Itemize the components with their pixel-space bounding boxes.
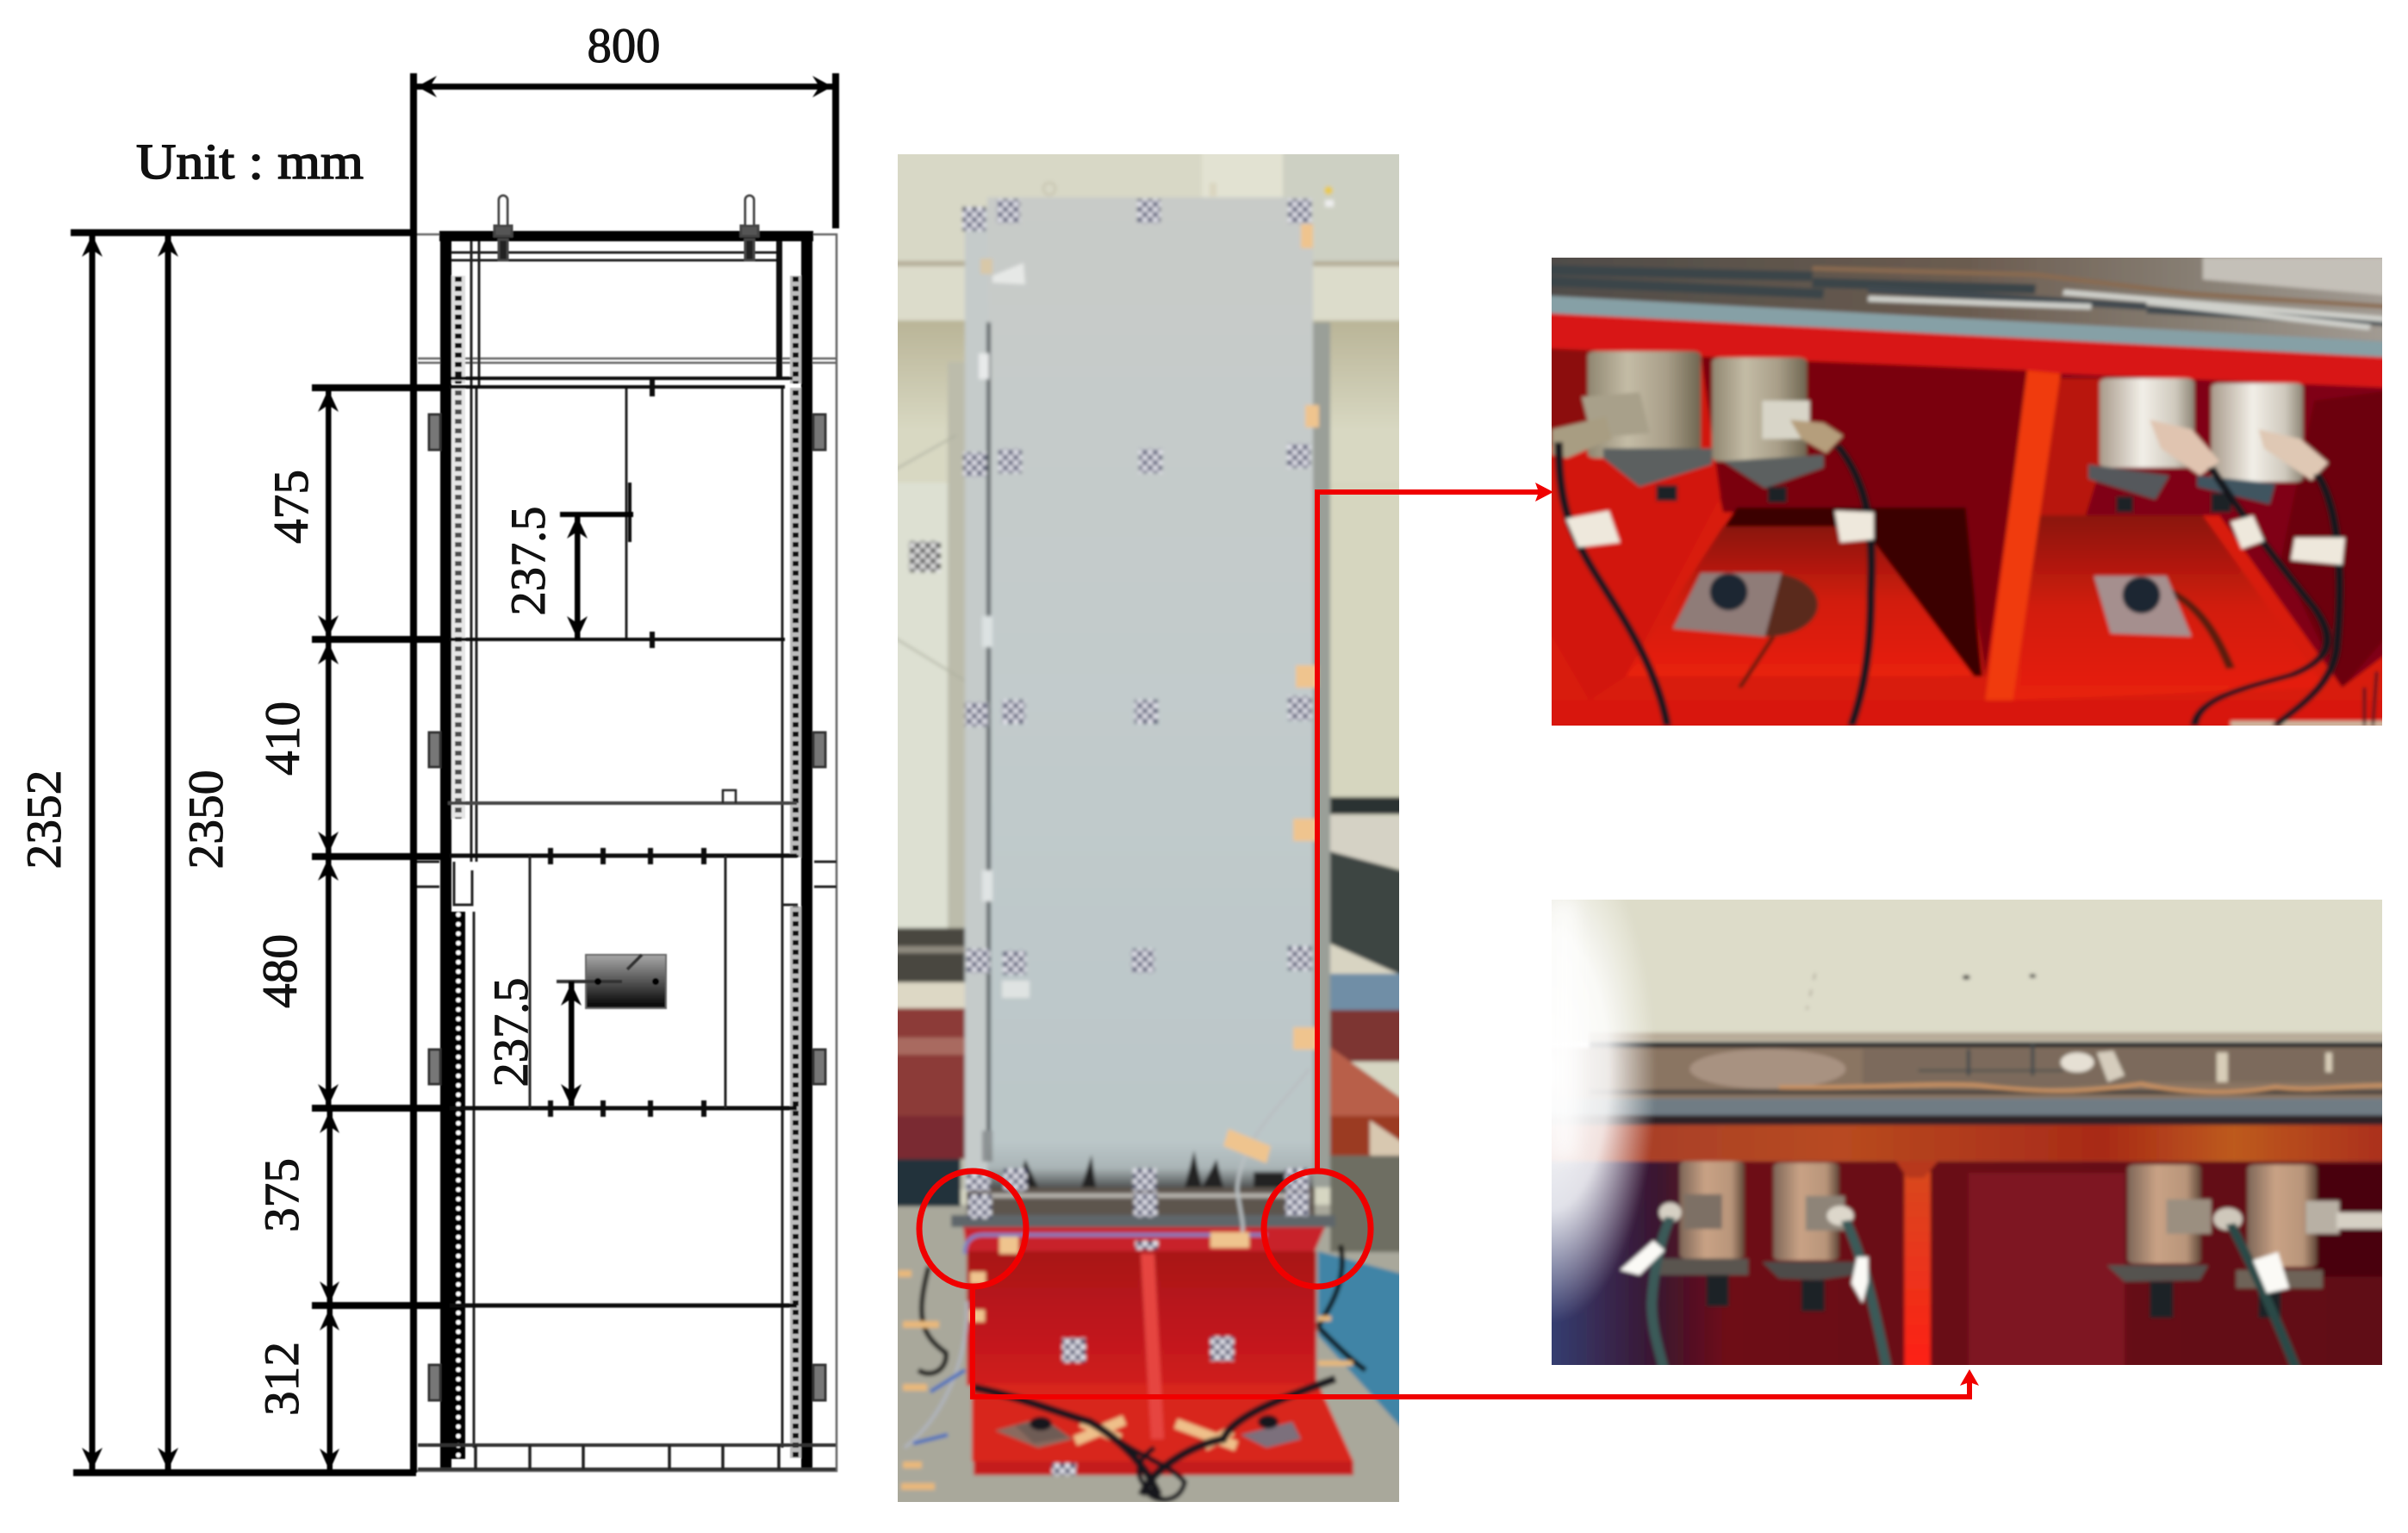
top lifting bolts xyxy=(495,196,758,260)
panel: dimensioned cabinet drawing xyxy=(17,19,839,1476)
photo: full specimen on red base xyxy=(887,146,1413,1517)
tape and cables on base xyxy=(898,1165,1368,1502)
arrow: left corner to lower photo xyxy=(973,1288,1979,1397)
weld band xyxy=(1534,1048,2408,1099)
shop floor surroundings right xyxy=(1318,797,1408,1435)
label: 312: 312 xyxy=(255,1342,309,1416)
label: 480: 480 xyxy=(253,934,308,1008)
red base frame xyxy=(1552,350,2382,703)
wall above weld xyxy=(1552,900,2382,1044)
shop floor surroundings left xyxy=(887,928,1413,1515)
arrow: right corner to upper photo xyxy=(1317,483,1553,1170)
callout: red circles and connector arrows xyxy=(919,483,1979,1397)
steel base block xyxy=(951,1187,1353,1475)
dimension lines and arrows xyxy=(71,73,839,1476)
label: 475: 475 xyxy=(264,470,319,544)
label: upper 237.5: 237.5 xyxy=(501,507,556,615)
photo: load cells, view one xyxy=(1552,258,2382,726)
photo: load cells, view two xyxy=(1552,900,2382,1365)
inner component box xyxy=(557,955,666,1008)
dark red bays xyxy=(1534,1162,2408,1373)
label: 2352: 2352 xyxy=(17,770,72,869)
label: 375: 375 xyxy=(255,1158,309,1232)
panel bolts xyxy=(551,379,704,1117)
sensor cables xyxy=(1652,1218,2298,1373)
cabinet body xyxy=(965,183,1334,1193)
label: 2350: 2350 xyxy=(179,770,233,869)
side brackets xyxy=(429,414,825,1400)
load cell cylinders xyxy=(1659,1162,2392,1318)
bright glare xyxy=(1552,900,1654,1317)
label: width 800: 800 xyxy=(588,19,660,73)
cabinet elevation xyxy=(414,196,837,1471)
dimension labels xyxy=(17,19,660,1416)
grey bolt plates xyxy=(1673,573,2231,688)
checker targets xyxy=(909,199,1311,1475)
label: unit: Unit : mm xyxy=(136,134,364,190)
circle: left corner xyxy=(919,1171,1026,1287)
white tape tags xyxy=(1620,1240,2289,1303)
load cell cylinders xyxy=(1552,352,2328,512)
circle: right corner xyxy=(1264,1171,1371,1287)
label: lower 237.5: 237.5 xyxy=(484,977,538,1087)
weld seam band xyxy=(1545,254,2392,342)
label: 410: 410 xyxy=(256,701,310,776)
lab wall background xyxy=(898,154,1399,1206)
orange red flange xyxy=(1534,1125,2408,1162)
sensor cables xyxy=(1559,442,2377,726)
white tape tags xyxy=(1566,511,2345,564)
